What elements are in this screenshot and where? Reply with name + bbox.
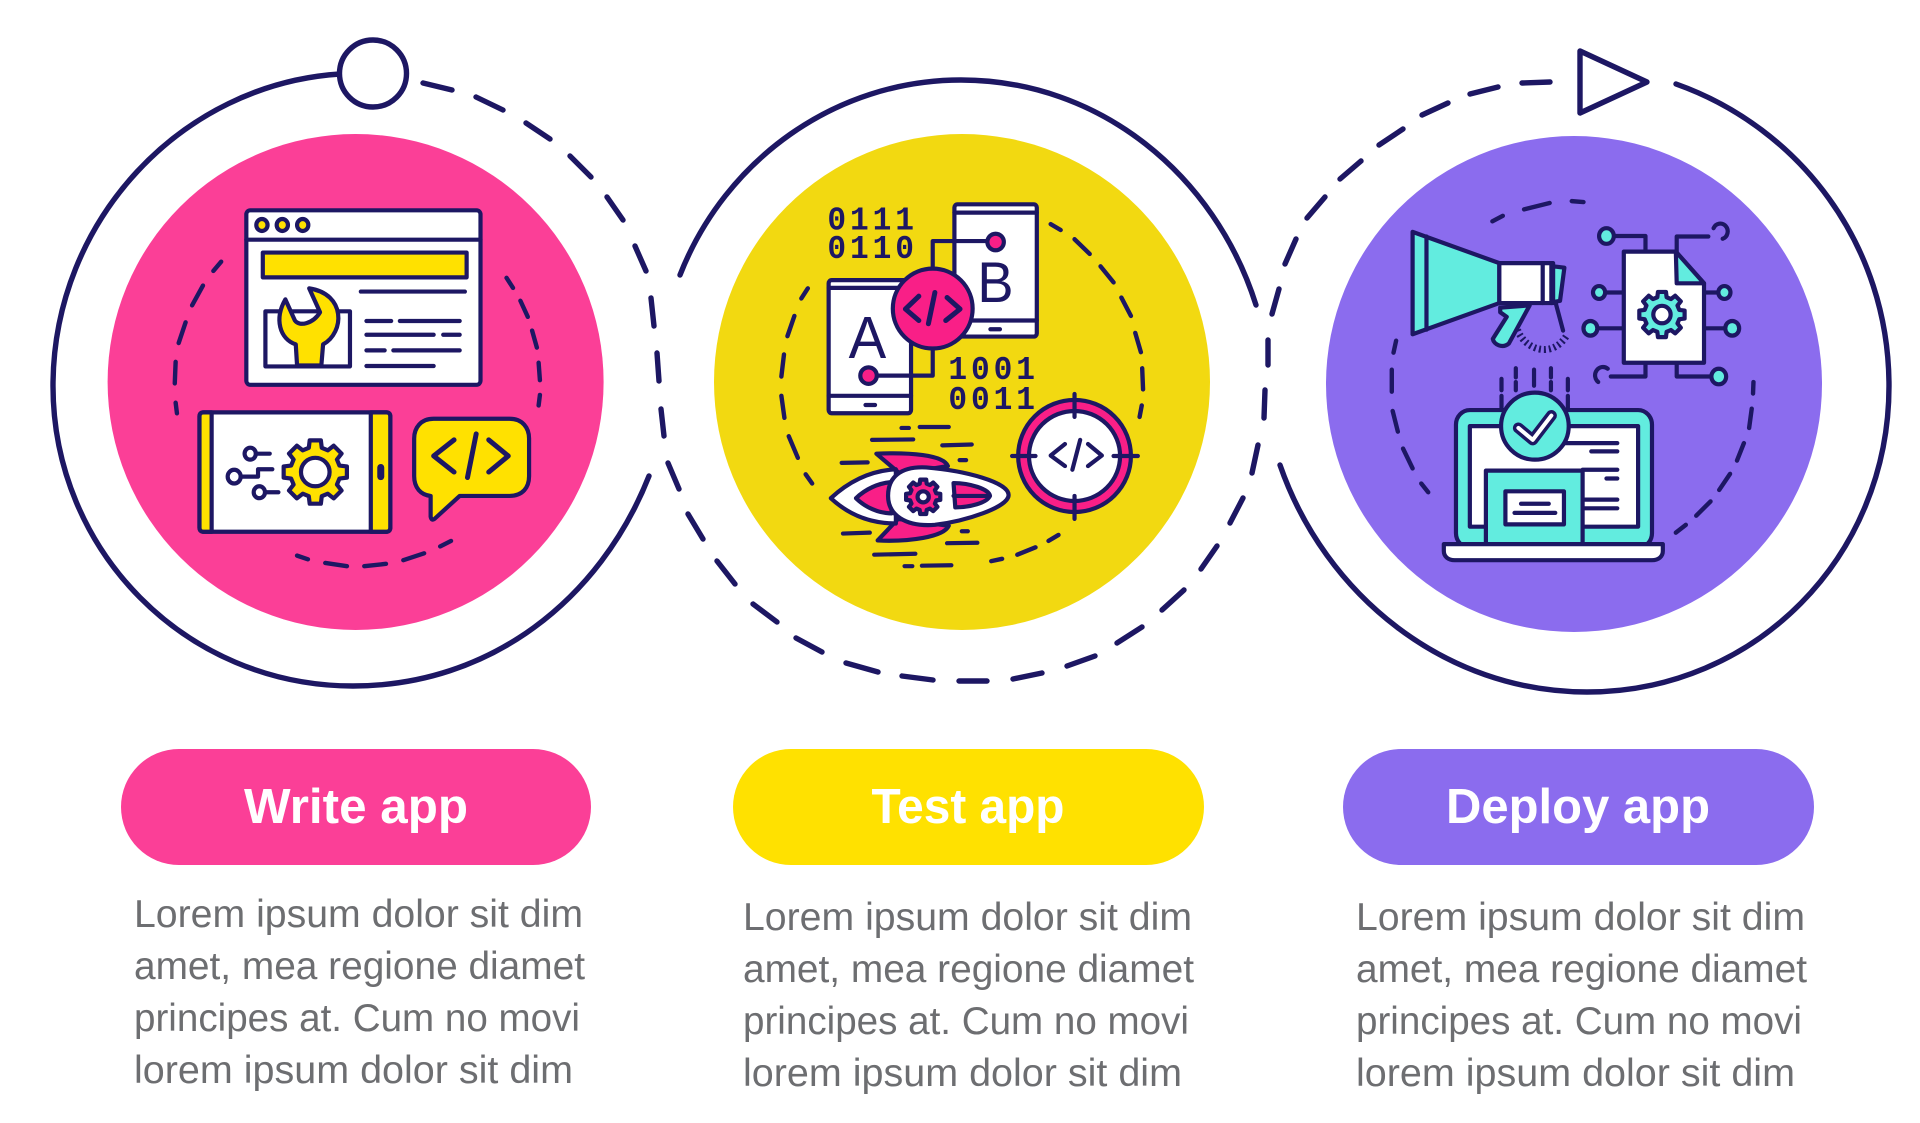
inner dashed ring bbox=[781, 224, 1143, 561]
icon: code speech bubble bbox=[414, 419, 529, 520]
step pill: write app: Write app bbox=[244, 780, 468, 834]
text block: test app: lorem ipsum dolor sit dim bbox=[743, 1052, 1182, 1095]
binary text bottom: 1001 bbox=[948, 351, 1039, 389]
solid ring: test app bbox=[680, 80, 1256, 305]
step pill: test app bbox=[733, 749, 1204, 865]
text block: deploy app: lorem ipsum dolor sit dim bbox=[1356, 1052, 1795, 1095]
text block: test app: principes at. Cum no movi bbox=[743, 1000, 1189, 1043]
binary text bottom: 0011 bbox=[948, 381, 1039, 419]
text block: write app: lorem ipsum dolor sit dim bbox=[134, 1049, 573, 1092]
icon: megaphone bbox=[1413, 232, 1567, 350]
step pill: write app bbox=[121, 749, 591, 865]
text block: write app: Lorem ipsum dolor sit dim bbox=[134, 893, 583, 936]
background circle: deploy app bbox=[1326, 136, 1822, 632]
icon: code target bbox=[1012, 394, 1138, 519]
start marker circle bbox=[340, 40, 406, 107]
inner dashed ring bbox=[1392, 201, 1753, 533]
panel: write app illustration bbox=[175, 210, 540, 566]
panel: deploy app illustration bbox=[1392, 201, 1753, 560]
text block: write app bbox=[134, 893, 585, 1092]
text block: test app bbox=[743, 896, 1194, 1095]
icon: code badge bbox=[893, 269, 973, 349]
icon: tablet B bbox=[954, 204, 1037, 337]
step pill: deploy app: Deploy app bbox=[1446, 780, 1710, 834]
dashed connecting wave bbox=[423, 82, 1550, 681]
background circle: test app bbox=[714, 134, 1210, 630]
panel: test app illustration bbox=[781, 202, 1143, 566]
background circle: write app bbox=[108, 134, 604, 630]
icon: tablet with settings bbox=[199, 412, 390, 532]
text block: deploy app bbox=[1356, 896, 1807, 1095]
text block: test app: Lorem ipsum dolor sit dim bbox=[743, 896, 1192, 939]
icon: browser window bbox=[246, 210, 481, 385]
text block: test app: amet, mea regione diamet bbox=[743, 948, 1194, 991]
connectors between tablets bbox=[860, 234, 1004, 384]
icon: tablet A bbox=[829, 280, 911, 413]
binary text bottom bbox=[948, 351, 1039, 419]
icon: check badge bbox=[1501, 368, 1569, 460]
solid ring: deploy app bbox=[1280, 84, 1889, 692]
step pill: test app: Test app bbox=[872, 780, 1064, 834]
inner dashed ring bbox=[175, 262, 540, 566]
text block: write app: principes at. Cum no movi bbox=[134, 997, 580, 1040]
text block: deploy app: amet, mea regione diamet bbox=[1356, 948, 1807, 991]
icon: rocket bbox=[831, 427, 1009, 566]
end marker triangle bbox=[1580, 51, 1647, 113]
solid ring: write app bbox=[53, 74, 649, 686]
step pill: deploy app bbox=[1343, 749, 1814, 865]
binary text top: 0111 bbox=[827, 202, 918, 240]
icon: settings document with circuit bbox=[1583, 224, 1739, 384]
binary text top: 0110 bbox=[827, 230, 918, 268]
icon: tablet B: B bbox=[977, 250, 1014, 314]
text block: deploy app: principes at. Cum no movi bbox=[1356, 1000, 1802, 1043]
text block: deploy app: Lorem ipsum dolor sit dim bbox=[1356, 896, 1805, 939]
icon: tablet A: A bbox=[849, 305, 886, 372]
binary text top bbox=[827, 202, 918, 268]
icon: laptop bbox=[1444, 410, 1663, 560]
text block: write app: amet, mea regione diamet bbox=[134, 945, 585, 988]
